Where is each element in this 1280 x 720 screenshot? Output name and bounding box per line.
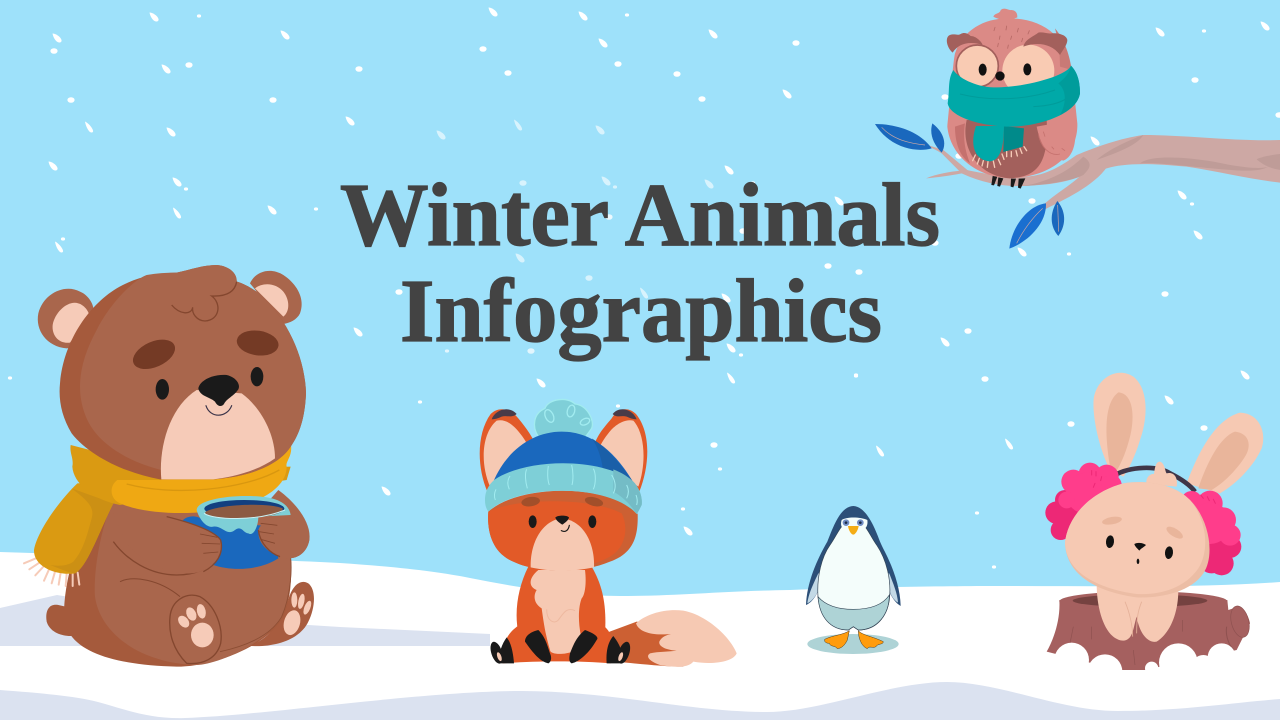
penguin belly xyxy=(818,520,890,630)
snow on stump base xyxy=(1054,643,1245,689)
title: Winter Animals xyxy=(340,166,940,265)
penguin dark back and hood xyxy=(816,506,890,573)
owl on branch xyxy=(875,9,1280,249)
rabbit arms xyxy=(1097,583,1178,642)
fox head xyxy=(488,491,638,571)
bear head xyxy=(60,265,306,479)
fox ears xyxy=(480,409,647,492)
fox with knit hat xyxy=(480,399,737,667)
yellow scarf wrap xyxy=(70,445,291,513)
owl eyes and beak xyxy=(956,45,1054,97)
rabbit in tree stump xyxy=(1045,373,1263,689)
rabbit head xyxy=(1065,462,1210,597)
bear hind paw xyxy=(170,595,221,664)
owl feet xyxy=(991,176,1025,189)
falling snowflakes xyxy=(8,8,1280,569)
blue-grey snow wave, bottom xyxy=(0,682,1280,720)
owl teal scarf xyxy=(948,66,1080,167)
penguin xyxy=(806,506,901,654)
pink earmuffs xyxy=(1045,463,1241,575)
rabbit ears xyxy=(1093,373,1263,493)
scarf tail with fringe xyxy=(24,482,113,586)
fox legs and paws xyxy=(488,630,633,665)
title: Infographics xyxy=(400,262,882,361)
fox body xyxy=(502,567,613,663)
hat pompom xyxy=(534,399,592,440)
blue-grey snow hill, left xyxy=(0,595,490,646)
owl body xyxy=(947,18,1077,178)
fox tail xyxy=(605,610,737,667)
bear with scarf and mug xyxy=(24,265,314,667)
bear arms holding mug xyxy=(113,513,309,574)
title xyxy=(340,166,940,361)
headband xyxy=(1115,468,1195,492)
bear left foot xyxy=(46,605,80,636)
fox knit hat xyxy=(485,432,642,514)
bear ears xyxy=(38,271,302,348)
penguin face xyxy=(841,517,867,535)
owl crest xyxy=(993,9,1017,20)
penguin feet xyxy=(825,631,883,649)
mug of cocoa xyxy=(182,496,291,569)
owl brow tufts xyxy=(947,32,1067,55)
bear muzzle and face xyxy=(156,367,275,479)
snowy ground xyxy=(0,552,1280,720)
penguin flippers xyxy=(806,542,901,606)
tree branch xyxy=(912,135,1280,210)
bear body xyxy=(64,490,310,667)
tree stump xyxy=(1047,591,1252,670)
bear right foot xyxy=(247,582,314,646)
blue leaves xyxy=(875,123,1064,249)
penguin shadow xyxy=(807,634,899,654)
